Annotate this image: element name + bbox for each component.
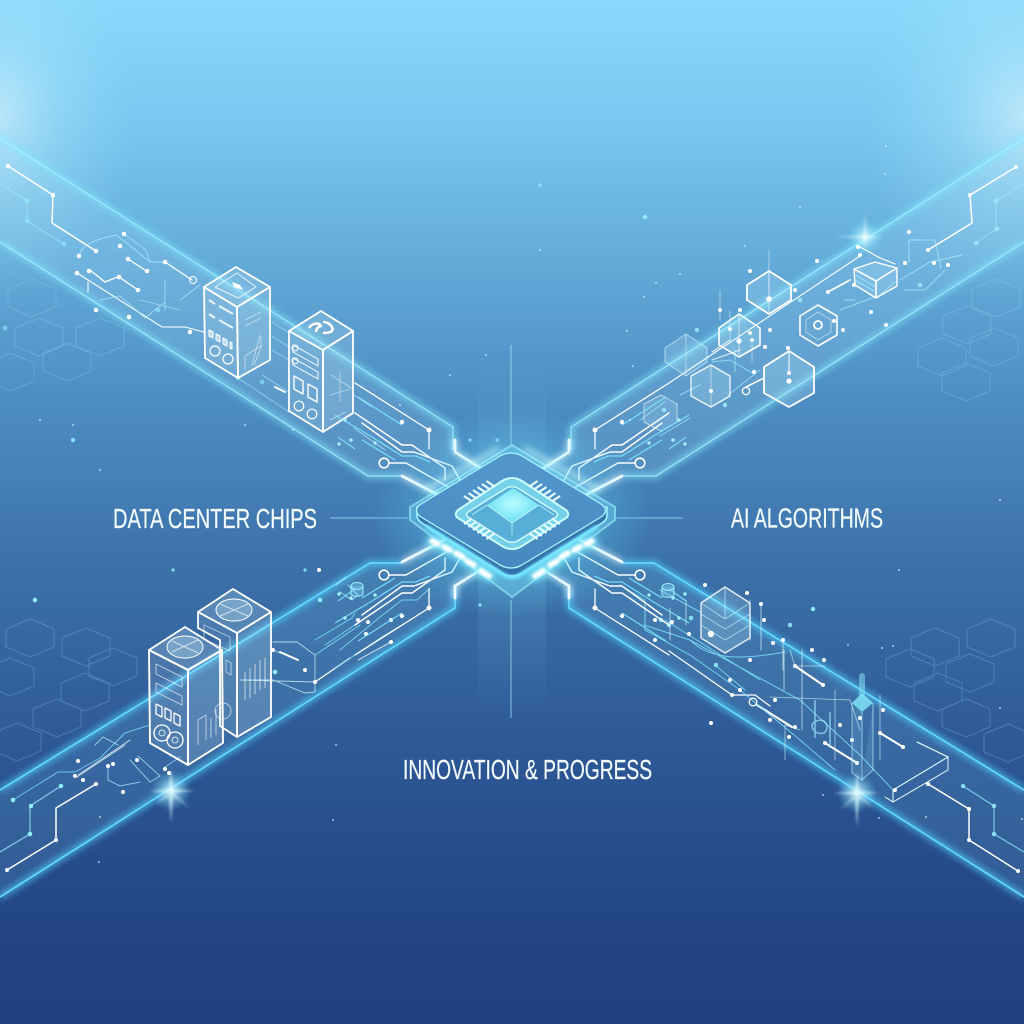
- hexagon: middle: [719, 314, 760, 357]
- chip halo: [372, 410, 652, 620]
- stars and lens flares: [149, 211, 883, 827]
- server: top left front: [204, 267, 270, 378]
- server: bottom left rear: [198, 589, 271, 737]
- chip pins: [464, 481, 560, 539]
- chip base: [416, 453, 607, 577]
- circuit traces near chip: [335, 383, 689, 655]
- label: ai algorithms: AI ALGORITHMS: [731, 502, 883, 534]
- central crosshair lines: [330, 345, 683, 720]
- label: data center chips: DATA CENTER CHIPS: [113, 503, 317, 534]
- hexagon: faded: [665, 334, 707, 376]
- cube: [854, 262, 897, 298]
- server: bottom left front: [149, 627, 223, 765]
- icon: small cylinder, bottom left beam: [351, 582, 363, 596]
- hexagon: ring: [800, 305, 837, 346]
- chip pads: [432, 541, 592, 576]
- circuit traces: bottom right: [620, 585, 1024, 871]
- server: top left rear: [289, 311, 353, 432]
- circuit traces: bottom left: [0, 570, 430, 870]
- hexagon: faded near chip: [644, 395, 677, 431]
- hexagons: AI nodes: [644, 262, 897, 431]
- hexagon: large lower: [764, 351, 814, 407]
- beam: bottom left: [0, 540, 483, 897]
- label: innovation and progress: INNOVATION & PROGRESS: [403, 754, 652, 785]
- beam: top right: [542, 138, 1024, 499]
- circuit traces: top left: [0, 166, 385, 450]
- tall tower: bottom right: [812, 673, 873, 780]
- hexagon: upper: [747, 271, 791, 314]
- circuit traces: top right: [640, 167, 1024, 436]
- central chip: [372, 410, 652, 620]
- hexagon: small lower: [691, 365, 730, 407]
- corner glows: [0, 0, 1024, 315]
- beam: bottom right: [541, 540, 1024, 897]
- diagonal beams: [0, 138, 1024, 897]
- beam: top left: [0, 138, 482, 499]
- faded hexagon mesh: [0, 279, 1024, 762]
- icon: small cylinder, bottom right beam: [662, 584, 674, 597]
- particle dots: [35, 146, 1022, 862]
- chip inner die: [456, 478, 568, 549]
- hexagonal stack: bottom right: [701, 587, 750, 653]
